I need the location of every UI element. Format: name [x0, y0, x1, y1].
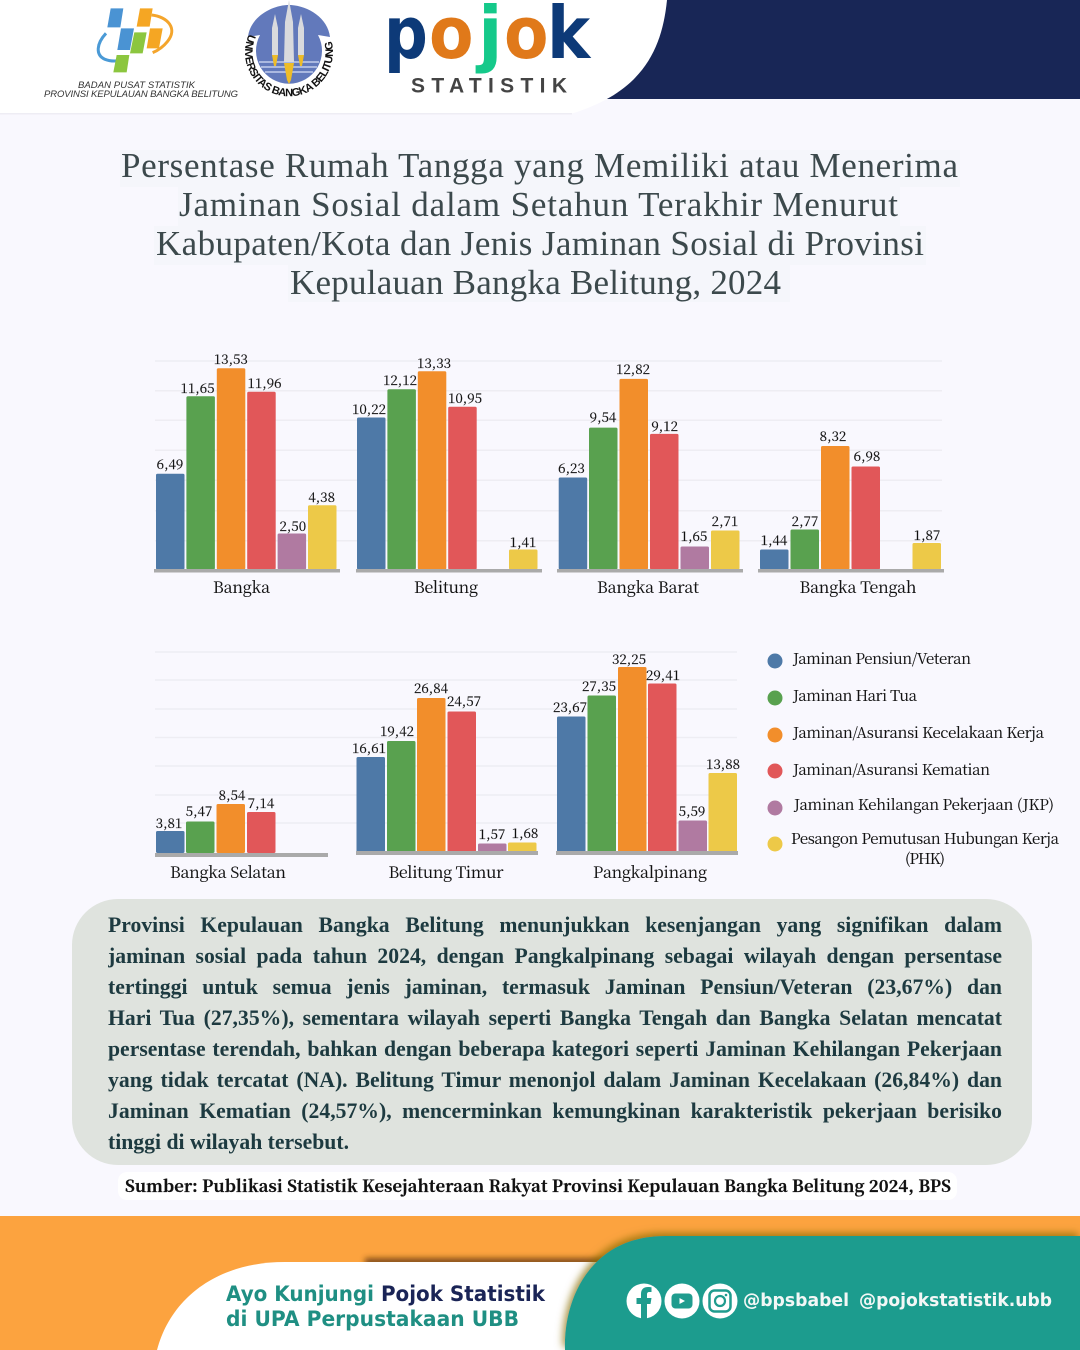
- summary text panel: tinggi di wilayah tersebut.: [108, 1130, 349, 1154]
- group: Pangkalpinang: 13,88: [706, 753, 740, 773]
- title: Jaminan Sosial dalam Setahun Terakhir Menurut: [179, 185, 898, 224]
- group: Bangka: 6,49: [157, 453, 183, 473]
- legend: Pesangon Pemutusan Hubungan Kerja: [791, 828, 1060, 849]
- summary text panel: jaminan sosial pada tahun 2024, dengan Pangkalpinang sebagai wilayah dengan persentase: [108, 944, 1002, 968]
- logo: Universitas Bangka Belitung: UNIVERSITAS BANGKA BELITUNG: [245, 35, 333, 96]
- group: Belitung: Belitung: [414, 575, 478, 598]
- legend: [768, 648, 1060, 869]
- invitation text: di UPA Perpustakaan UBB: [226, 1307, 519, 1331]
- group: Bangka Tengah: 2,77: [792, 510, 818, 530]
- logo: BPS: [44, 8, 238, 100]
- group: Bangka Selatan: 8,54: [219, 784, 246, 804]
- group: Belitung: 10,22: [352, 398, 386, 418]
- legend: Jaminan/Asuransi Kematian: [792, 759, 990, 780]
- social handles: [743, 1290, 1052, 1311]
- summary text panel: yang tidak tercatat (NA). Belitung Timur menonjol dalam Jaminan Kecelakaan (26,84%) dan: [108, 1068, 1002, 1092]
- summary text panel: Jaminan Kematian (24,57%), mencerminkan kemungkinan karakteristik pekerjaan berisiko: [108, 1099, 1002, 1123]
- group: Bangka: 4,38: [308, 486, 335, 506]
- group: Belitung Timur: 1,68: [512, 822, 538, 842]
- group: Bangka Barat: 9,54: [590, 406, 617, 426]
- group: Pangkalpinang: Pangkalpinang: [593, 860, 707, 883]
- group: Bangka Selatan: Bangka Selatan: [170, 860, 286, 883]
- group: Belitung Timur: Belitung Timur: [388, 860, 504, 883]
- group: Bangka Tengah: 6,98: [854, 445, 880, 465]
- legend: Jaminan Kehilangan Pekerjaan (JKP): [793, 794, 1054, 815]
- legend: Jaminan Pensiun/Veteran: [792, 648, 971, 669]
- legend: Jaminan Hari Tua: [792, 685, 918, 706]
- bar chart: top row: [154, 348, 944, 598]
- group: Belitung Timur: [352, 677, 538, 883]
- group: Pangkalpinang: 29,41: [646, 664, 680, 684]
- group: Bangka Tengah: Bangka Tengah: [800, 575, 917, 598]
- group: Belitung: 13,33: [417, 352, 451, 372]
- social handles: @bpsbabel: [743, 1290, 849, 1311]
- group: Belitung Timur: 19,42: [380, 720, 414, 740]
- summary text panel: persentase terendah, bahkan dengan beberapa kategori seperti Jaminan Kehilangan Pekerjaan: [108, 1037, 1002, 1061]
- group: Belitung Timur: 26,84: [414, 677, 449, 697]
- footer: orange band: [0, 1216, 1080, 1350]
- group: Bangka Tengah: 8,32: [820, 425, 846, 445]
- BPS caption: BADAN PUSAT STATISTIK: [78, 80, 196, 91]
- group: Bangka Barat: 1,65: [681, 525, 707, 545]
- group: Belitung: [352, 352, 542, 598]
- group: Pangkalpinang: [553, 648, 740, 883]
- group: Bangka Tengah: [758, 425, 944, 598]
- group: Bangka Barat: [557, 358, 743, 598]
- group: Pangkalpinang: 23,67: [553, 696, 587, 716]
- group: Pangkalpinang: 27,35: [582, 675, 616, 695]
- group: Bangka: Bangka: [213, 575, 270, 598]
- group: Pangkalpinang: 32,25: [612, 648, 646, 668]
- group: Belitung: 10,95: [448, 387, 482, 407]
- logo: Pojok Statistik: [384, 0, 591, 98]
- bar chart: bottom row: [155, 648, 740, 883]
- footer: white invitation tab: [157, 1258, 640, 1350]
- group: Bangka: 13,53: [214, 348, 248, 368]
- group: Belitung: 12,12: [383, 369, 417, 389]
- group: Bangka Selatan: 7,14: [248, 792, 275, 812]
- group: Belitung Timur: 16,61: [352, 737, 386, 757]
- group: Bangka Barat: 9,12: [651, 415, 678, 435]
- icon: youtube: [664, 1284, 700, 1318]
- group: Belitung: 1,41: [510, 531, 536, 551]
- group: Bangka Barat: 12,82: [616, 358, 650, 378]
- group: Bangka Barat: 2,71: [712, 510, 738, 530]
- group: Belitung Timur: 1,57: [479, 823, 505, 843]
- logo: Universitas Bangka Belitung: [245, 0, 333, 96]
- icon: facebook: [626, 1284, 662, 1318]
- group: Bangka: 11,96: [247, 372, 282, 392]
- header band: [0, 0, 1080, 114]
- legend: (PHK): [905, 848, 945, 869]
- legend: Jaminan/Asuransi Kecelakaan Kerja: [792, 722, 1045, 743]
- group: Bangka: 2,50: [279, 515, 306, 535]
- BPS caption: [44, 80, 238, 100]
- summary text panel: [72, 899, 1032, 1165]
- footer: teal social panel: [565, 1236, 1080, 1350]
- invitation text: Ayo Kunjungi Pojok Statistik: [226, 1282, 546, 1306]
- title: Persentase Rumah Tangga yang Memiliki atau Menerima: [121, 146, 958, 185]
- group: Bangka Selatan: [155, 784, 328, 883]
- group: Pangkalpinang: 5,59: [679, 800, 705, 820]
- invitation text: [226, 1282, 546, 1331]
- social handles: @pojokstatistik.ubb: [859, 1290, 1052, 1311]
- group: Bangka: 11,65: [180, 377, 215, 397]
- logo: Pojok Statistik: STATISTIK: [411, 74, 567, 98]
- title: Kabupaten/Kota dan Jenis Jaminan Sosial di Provinsi: [156, 224, 924, 263]
- group: Bangka Barat: Bangka Barat: [597, 575, 699, 598]
- source note: Sumber: Publikasi Statistik Kesejahteraan Rakyat Provinsi Kepulauan Bangka Belitung 2024, BPS: [125, 1173, 951, 1197]
- group: Bangka Tengah: 1,87: [914, 524, 940, 544]
- icon: instagram: [702, 1284, 738, 1318]
- title: [120, 146, 960, 302]
- group: Bangka Tengah: 1,44: [761, 529, 788, 549]
- group: Belitung Timur: 24,57: [447, 690, 481, 710]
- BPS caption: PROVINSI KEPULAUAN BANGKA BELITUNG: [44, 89, 238, 100]
- title: Kepulauan Bangka Belitung, 2024: [290, 263, 781, 302]
- summary text panel: Hari Tua (27,35%), sementara wilayah seperti Bangka Tengah dan Bangka Selatan mencatat: [108, 1006, 1002, 1030]
- group: Bangka Barat: 6,23: [558, 457, 585, 477]
- group: Bangka Selatan: 3,81: [156, 812, 182, 832]
- group: Bangka: [154, 348, 340, 598]
- group: Bangka Selatan: 5,47: [186, 800, 212, 820]
